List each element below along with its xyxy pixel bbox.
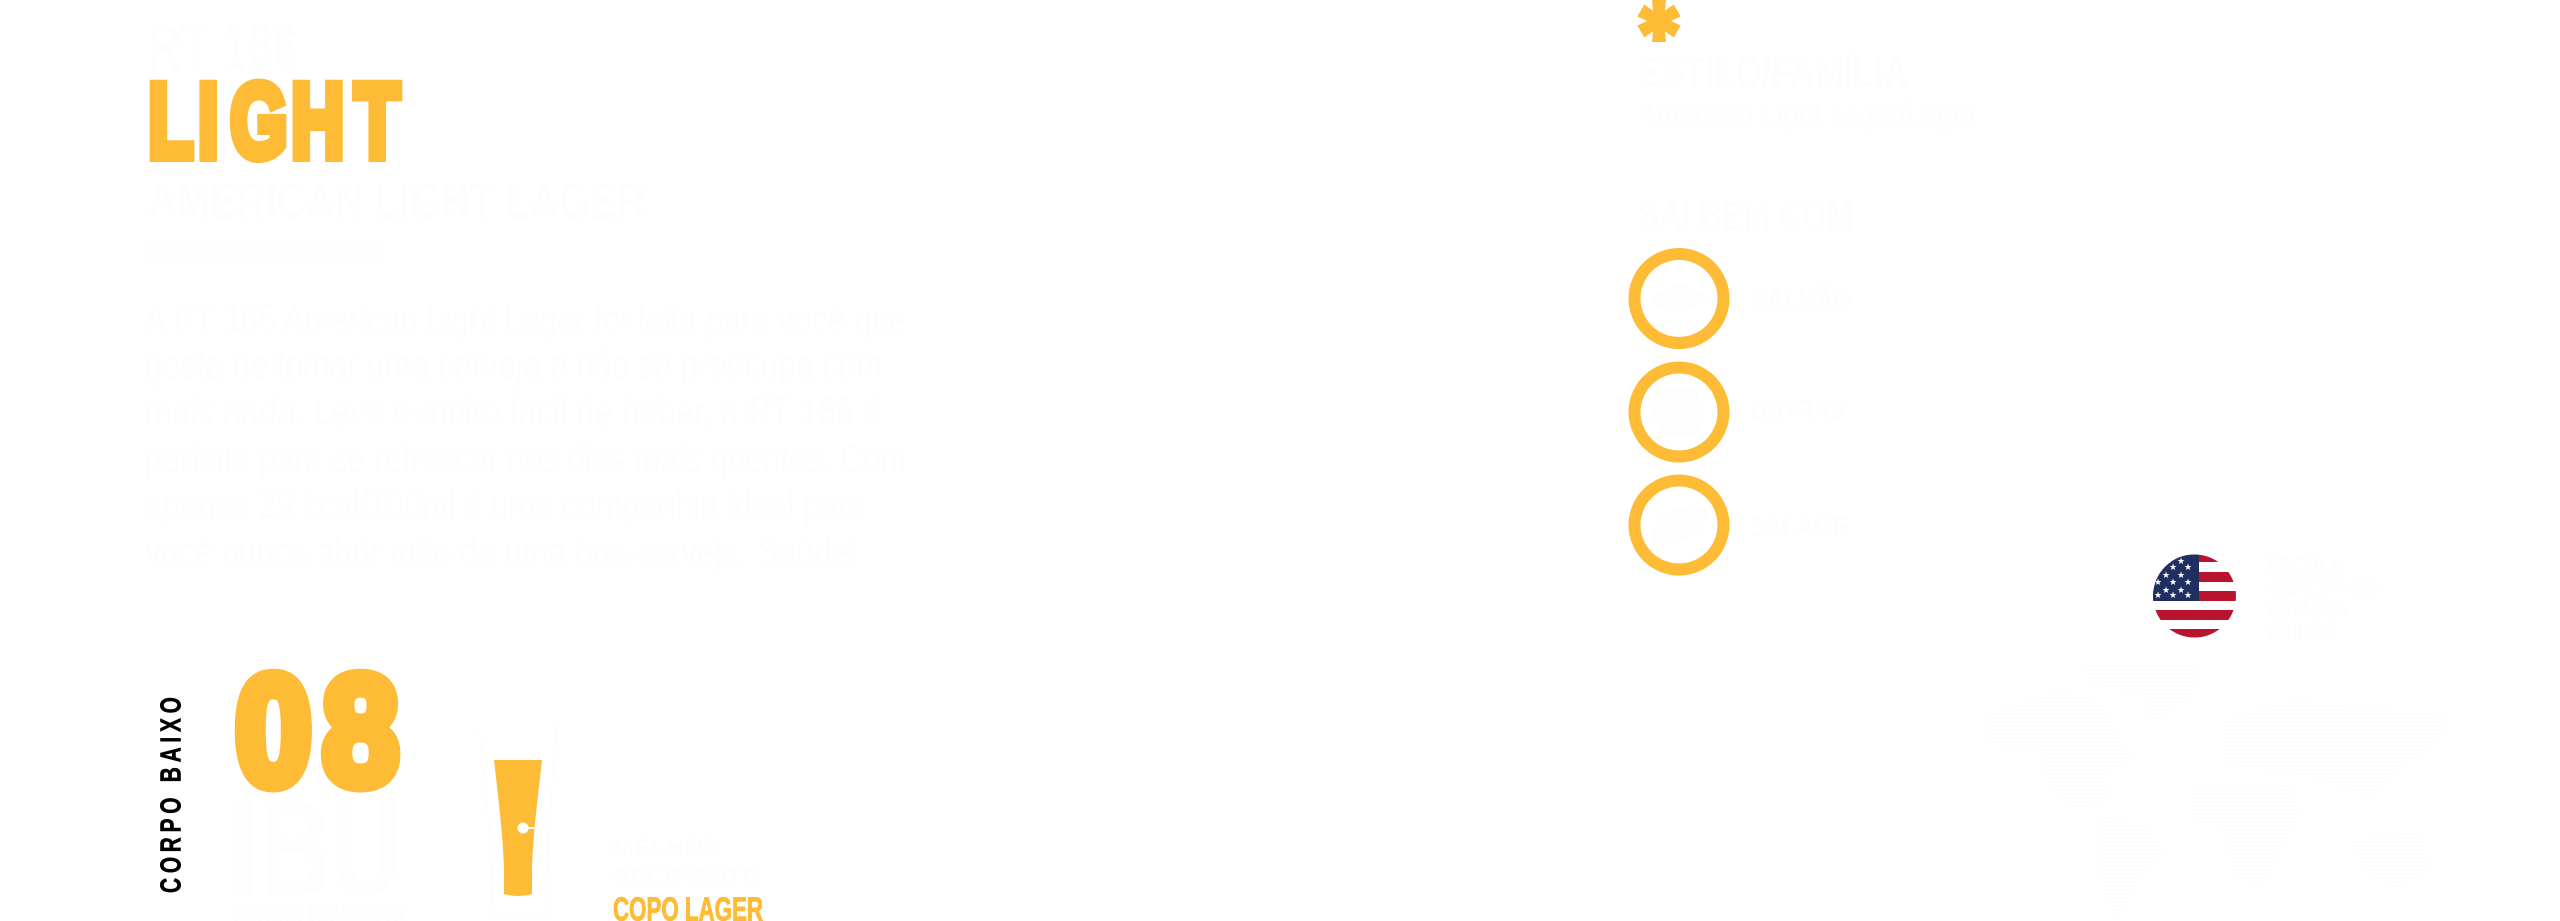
vertical label: body: CORPO BAIXO (155, 697, 187, 893)
glass marker (518, 822, 528, 834)
icon: USA flag: ★ (2162, 570, 2170, 580)
body text: você nunca abrir mão de uma boa cerveja. Saúde! (145, 530, 858, 574)
pairing: salami (1634, 480, 1848, 570)
glass callout (537, 828, 763, 921)
body text: gosta de tomar uma cerveja e não se preocupa com (145, 343, 883, 387)
glass callout: RECIPIENTE (613, 864, 758, 891)
pairing: oysters (1634, 368, 1845, 456)
icon: salmon (1651, 284, 1708, 312)
panel: origin text: AMERICANA NOS (2267, 574, 2379, 600)
callout text: MELHOR (613, 834, 721, 861)
stat: bitterness (232, 644, 404, 921)
icon: lager glass (479, 723, 557, 917)
icon: salami (1645, 497, 1713, 553)
icon: USA flag: ★ (2162, 585, 2170, 595)
big label: IBU: IBU (232, 772, 402, 921)
style family label: ESTILO/FAMÍLIA (1638, 47, 1908, 97)
icon: USA flag: ★ (2184, 562, 2192, 572)
icon: USA flag: ★ (2184, 590, 2192, 600)
icon: asterisk (1637, 0, 1681, 42)
icon: USA flag: ★ (2177, 556, 2185, 566)
panel: origin text: ESTADOS (2267, 597, 2348, 623)
icon: USA flag: ★ (2154, 590, 2162, 600)
body text (145, 297, 907, 574)
pairing: salmon: SALMÃO (1752, 283, 1851, 317)
icon: USA flag: ★ (2169, 577, 2177, 587)
panel: origin text: ESCOLA (2267, 552, 2343, 578)
heading: LIGHT: LIGHT (148, 63, 400, 180)
panel: beer description (145, 10, 907, 574)
beer fill (494, 760, 542, 896)
icon: USA flag: ★ (2177, 570, 2185, 580)
style family value: American Light Lager/Lager (1638, 96, 1977, 132)
world map: dotted (1985, 663, 2450, 921)
pairing: oysters: OSTRAS (1750, 394, 1845, 425)
pairing: salami: SALAME (1750, 511, 1848, 544)
icon: USA flag: ★ (2177, 585, 2185, 595)
icon: USA flag: ★ (2184, 577, 2192, 587)
panel: origin text (2249, 552, 2379, 710)
icon: USA flag: ★ (2169, 590, 2177, 600)
body text: apenas 29 kcal/100ml é uma companhia ideal para (145, 483, 868, 527)
icon: USA flag: ★ (2154, 577, 2162, 587)
panel: style family (1638, 47, 1977, 132)
subtitle bar (145, 245, 385, 263)
body text: perfeita para se refrescar nos dias mais quentes. Com (145, 437, 907, 481)
style name: AMERICAN LIGHT LAGER (148, 173, 645, 229)
icon: USA flag (2153, 554, 2236, 638)
panel: origin text: UNIDOS (2267, 619, 2335, 645)
body text: A RT 166 American Light Lager foi feita para você que (145, 297, 907, 341)
icon: USA flag: ★ (2169, 562, 2177, 572)
body text: mais nada. Leve e muito fácil de beber, a RT 166 é (145, 390, 881, 434)
panel: pairings (1634, 192, 1853, 570)
beer name: RT 166 (148, 10, 298, 84)
callout leader (537, 828, 600, 921)
glass outline (479, 723, 557, 917)
icon: oyster (1653, 386, 1705, 438)
number: 08: 08 (236, 644, 398, 817)
pairing: salmon (1634, 254, 1851, 343)
pairings heading: SAI BEM COM (1638, 192, 1853, 239)
